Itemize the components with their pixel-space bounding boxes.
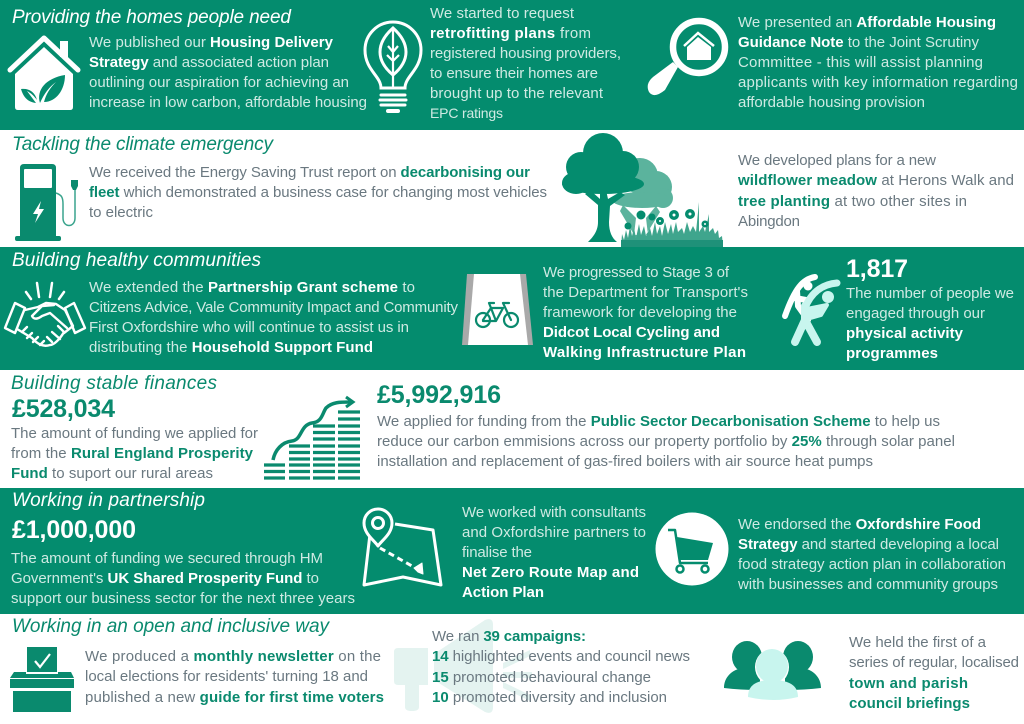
- icon: rising coin stacks: [264, 397, 360, 478]
- icon: light bulb with leaf: [365, 22, 421, 111]
- icon: handshake: [5, 283, 85, 346]
- text: partnership grant scheme: [89, 279, 458, 356]
- icon: ballot box: [10, 647, 74, 712]
- text: housing delivery strategy: [89, 34, 367, 111]
- panel: working in an open and inclusive way: [0, 614, 1024, 724]
- text: public sector decarbonisation scheme statistic: installation and replacement of gas-fired boilers with air source heat pumps: [377, 453, 873, 470]
- icon: faded megaphone: [394, 619, 532, 713]
- text: net zero route map: and Oxfordshire partners to: [462, 524, 646, 541]
- text: oxfordshire food strategy: with businesses and community groups: [737, 576, 998, 593]
- text: net zero route map: [462, 504, 646, 601]
- panel: building healthy communities: [0, 247, 1024, 370]
- text: campaigns: We ran 39 campaigns:: [432, 628, 586, 645]
- text: wildflower meadow and tree planting: Abingdon: [738, 213, 800, 230]
- text: monthly newsletter and voter guide: [85, 648, 384, 706]
- text: partnership grant scheme: distributing the Household Support Fund: [89, 339, 373, 356]
- text: net zero route map: Net Zero Route Map and: [462, 564, 639, 581]
- text: monthly newsletter and voter guide: We produced a monthly newsletter on the: [85, 648, 381, 665]
- text: affordable housing guidance note: Committee - this will assist planning: [738, 54, 983, 71]
- text: retrofitting plans: registered housing providers,: [430, 45, 621, 62]
- text: shared prosperity fund statistic: £1,000,000: [12, 516, 136, 544]
- text: town and parish council briefings: council briefings: [849, 695, 970, 712]
- text: affordable housing guidance note: affordable housing provision: [738, 94, 925, 111]
- heading: working in partnership: Working in partnership: [12, 490, 205, 511]
- text: wildflower meadow and tree planting: We developed plans for a new: [738, 152, 936, 169]
- heading: building stable finances: Building stable finances: [11, 373, 218, 394]
- panel: providing the homes people need: [0, 0, 1024, 130]
- text: housing delivery strategy: outlining our aspiration for achieving an: [89, 74, 349, 91]
- text: town and parish council briefings: series of regular, localised: [849, 654, 1019, 671]
- heading: providing the homes people need: Providing the homes people need: [12, 7, 292, 28]
- text: oxfordshire food strategy: Strategy and started developing a local: [738, 536, 999, 553]
- text: housing delivery strategy: Strategy and associated action plan: [89, 54, 329, 71]
- text: shared prosperity fund statistic: The amount of funding we secured through HM: [11, 550, 323, 567]
- text: net zero route map: Action Plan: [462, 584, 544, 601]
- text: retrofitting plans: brought up to the relevant: [430, 85, 604, 102]
- panel: tackling the climate emergency: [0, 130, 1024, 247]
- text: didcot cycling and walking plan: We progressed to Stage 3 of: [543, 264, 730, 281]
- text: decarbonising our fleet: fleet which demonstrated a business case for changing most vehicles: [89, 184, 547, 201]
- text: affordable housing guidance note: Guidance Note to the Joint Scrutiny: [738, 34, 980, 51]
- icon: magnifying glass with house: [648, 21, 725, 95]
- text: physical activity statistic: engaged through our: [846, 305, 985, 322]
- text: wildflower meadow and tree planting: tree planting at two other sites in: [738, 193, 967, 210]
- text: shared prosperity fund statistic: Government's UK Shared Prosperity Fund to: [11, 570, 319, 587]
- text: town and parish council briefings: We held the first of a: [849, 634, 987, 651]
- text: didcot cycling and walking plan: [543, 264, 748, 361]
- text: affordable housing guidance note: applicants with key information regarding: [738, 74, 1018, 91]
- text: decarbonising our fleet: to electric: [89, 204, 154, 221]
- text: physical activity statistic: The number of people we: [846, 285, 1014, 302]
- text: retrofitting plans: [430, 5, 621, 121]
- text: shared prosperity fund statistic: support our business sector for the next three years: [11, 590, 355, 607]
- icon: cycle lane with bicycle: [462, 274, 533, 345]
- text: net zero route map: We worked with consultants: [462, 504, 646, 521]
- text: physical activity statistic: physical activity: [846, 325, 964, 342]
- panel: working in partnership: [0, 488, 1024, 614]
- text: didcot cycling and walking plan: Didcot Local Cycling and: [543, 324, 720, 341]
- text: rural england prosperity fund statistic: The amount of funding we applied for: [11, 425, 258, 442]
- text: rural england prosperity fund statistic: £528,034: [12, 395, 115, 423]
- text: physical activity statistic: [846, 255, 1014, 362]
- text: rural england prosperity fund statistic: [11, 395, 258, 482]
- text: physical activity statistic: 1,817: [846, 255, 908, 283]
- text: retrofitting plans: We started to request: [430, 5, 575, 22]
- text: partnership grant scheme: Citizens Advice, Vale Community Impact and Community: [89, 299, 458, 316]
- panel: building stable finances: [0, 370, 1024, 488]
- text: rural england prosperity fund statistic: from the Rural England Prosperity: [11, 445, 254, 462]
- text: shared prosperity fund statistic: [11, 516, 355, 607]
- icon: group of people: [724, 641, 821, 700]
- text: campaigns: 15 promoted behavioural change: [432, 669, 651, 686]
- text: public sector decarbonisation scheme statistic: reduce our carbon emmisions across our property portfolio by 25% through solar panel: [377, 433, 955, 450]
- text: monthly newsletter and voter guide: published a new guide for first time voters: [85, 689, 384, 706]
- text: town and parish council briefings: [849, 634, 1019, 712]
- text: monthly newsletter and voter guide: local elections for residents' turning 18 and: [85, 668, 368, 685]
- text: retrofitting plans: to ensure their homes are: [430, 65, 598, 82]
- text: rural england prosperity fund statistic: Fund to suport our rural areas: [11, 465, 213, 482]
- text: didcot cycling and walking plan: Walking Infrastructure Plan: [543, 344, 746, 361]
- text: retrofitting plans: retrofitting plans from: [430, 25, 591, 42]
- text: decarbonising our fleet: [89, 164, 547, 221]
- icon: electric vehicle charging pump: [15, 164, 78, 241]
- text: wildflower meadow and tree planting: wildflower meadow at Herons Walk and: [737, 172, 1014, 189]
- icon: house with leaves: [10, 38, 78, 110]
- text: wildflower meadow and tree planting: [737, 152, 1014, 230]
- heading: working in an open and inclusive way: Working in an open and inclusive way: [12, 616, 330, 637]
- text: town and parish council briefings: town and parish: [849, 675, 968, 692]
- text: public sector decarbonisation scheme statistic: We applied for funding from the Public Sector Decarbonisation Scheme to help us: [377, 413, 940, 430]
- text: public sector decarbonisation scheme statistic: £5,992,916: [377, 381, 501, 409]
- text: oxfordshire food strategy: We endorsed the Oxfordshire Food: [738, 516, 981, 533]
- text: housing delivery strategy: We published our Housing Delivery: [89, 34, 334, 51]
- text: public sector decarbonisation scheme statistic: [377, 381, 955, 470]
- text: housing delivery strategy: increase in low carbon, affordable housing: [89, 94, 367, 111]
- text: affordable housing guidance note: We presented an Affordable Housing: [738, 14, 996, 31]
- text: decarbonising our fleet: We received the Energy Saving Trust report on decarbonising our: [89, 164, 530, 181]
- text: retrofitting plans: EPC ratings: [430, 105, 503, 121]
- text: didcot cycling and walking plan: framework for developing the: [543, 304, 737, 321]
- text: affordable housing guidance note: [738, 14, 1018, 111]
- text: oxfordshire food strategy: food strategy action plan in collaboration: [738, 556, 1006, 573]
- text: net zero route map: finalise the: [462, 544, 532, 561]
- text: partnership grant scheme: First Oxfordshire who will continue to assist us in: [89, 319, 409, 336]
- heading: tackling the climate emergency: Tackling the climate emergency: [12, 134, 274, 155]
- text: campaigns: [432, 628, 690, 706]
- text: didcot cycling and walking plan: the Department for Transport's: [543, 284, 748, 301]
- icon: shopping trolley: [656, 512, 728, 586]
- text: oxfordshire food strategy: [737, 516, 1006, 593]
- text: campaigns: 14 highlighted events and council news: [432, 648, 690, 665]
- text: physical activity statistic: programmes: [846, 345, 938, 362]
- heading: building healthy communities: Building healthy communities: [12, 250, 262, 271]
- text: partnership grant scheme: We extended the Partnership Grant scheme to: [89, 279, 415, 296]
- icon: trees and wildflower meadow: [562, 133, 723, 247]
- icon: map with location pin: [364, 509, 441, 585]
- text: campaigns: 10 promoted diversity and inclusion: [432, 689, 667, 706]
- icon: stretching figures: [785, 277, 837, 342]
